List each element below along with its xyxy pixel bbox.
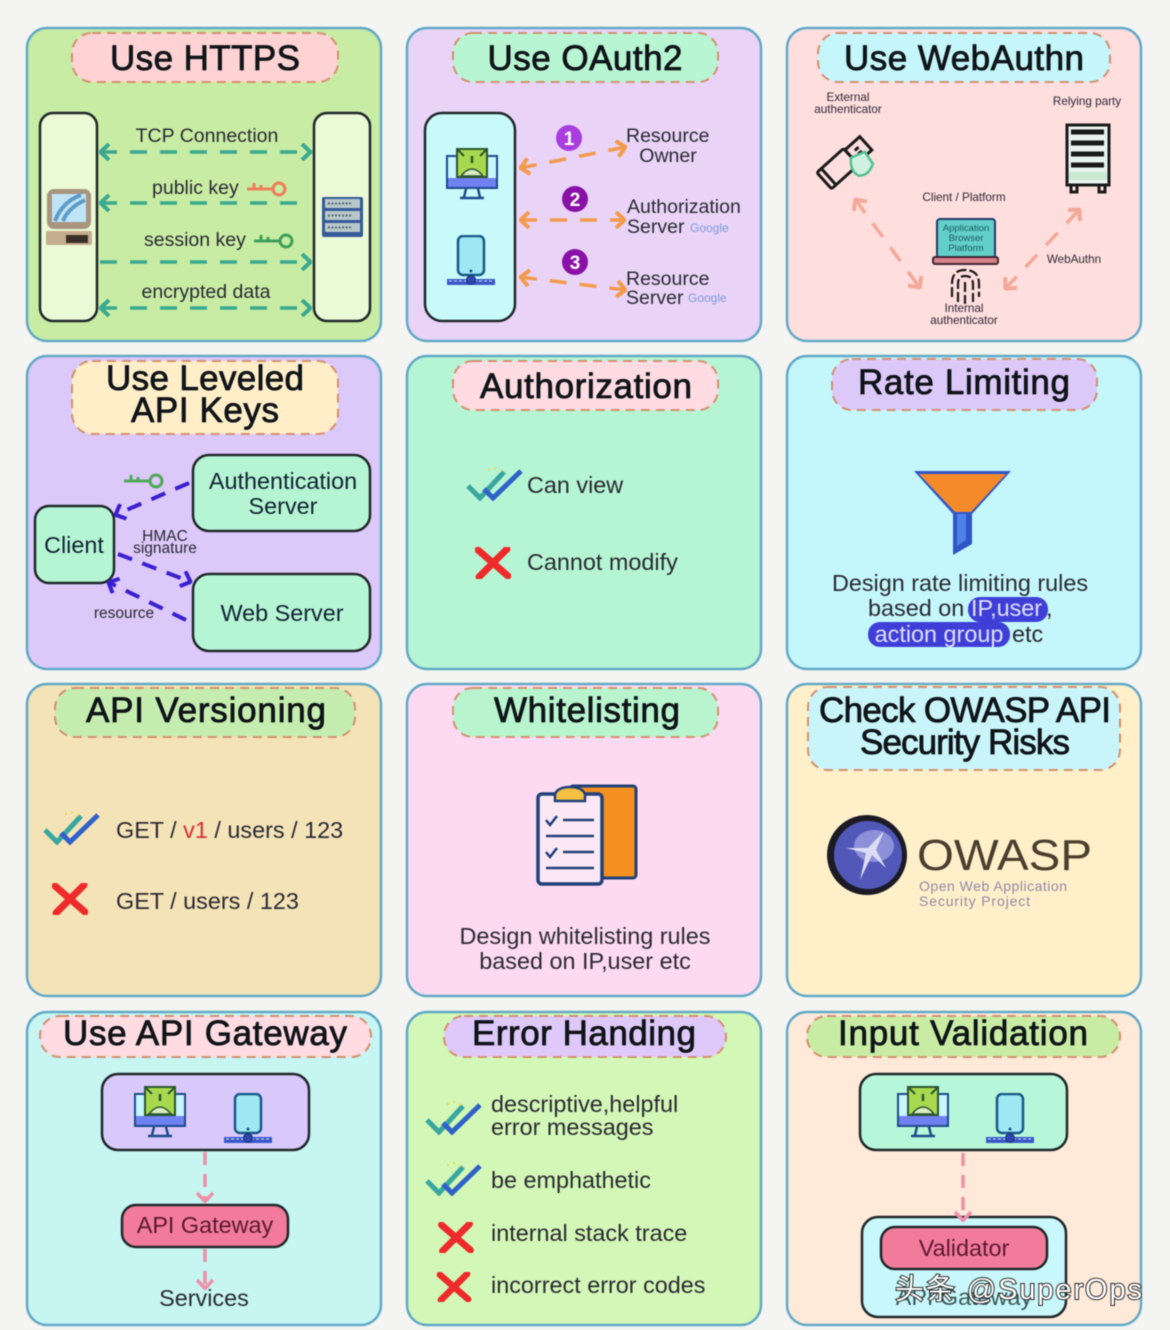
step 2: Authorization Server: Server <box>627 216 685 238</box>
box: Authentication Server: Server <box>249 493 318 519</box>
panel: Error Handing <box>407 1012 761 1325</box>
item: descriptive messages <box>427 1091 678 1140</box>
heading: Use HTTPS: Use HTTPS <box>110 39 300 78</box>
item: internal stack trace: internal stack trace <box>491 1220 687 1246</box>
icon: laptop with application stack: Application <box>943 223 989 234</box>
heading: Input Validation: Input Validation <box>838 1014 1088 1053</box>
text: whitelisting rules <box>460 923 710 974</box>
item: correct versioned URL <box>45 812 343 843</box>
heading: Use API Gateway: Use API Gateway <box>63 1014 348 1053</box>
logo: OWASP wordmark: Security Project <box>919 893 1030 909</box>
label: WebAuthn: WebAuthn <box>1047 253 1101 266</box>
panel: Use API Gateway <box>27 1012 381 1325</box>
item: be emphathetic <box>427 1163 651 1193</box>
panel: Whitelisting <box>407 684 761 996</box>
step 1: Resource Owner: Resource <box>626 125 709 147</box>
icon: laptop with application stack: Platform <box>948 243 984 254</box>
box: Web Server: Web Server <box>220 600 344 626</box>
step 3: Resource Server <box>520 249 727 309</box>
step 1: Resource Owner: 1 <box>564 129 575 150</box>
item: descriptive messages: descriptive,helpful <box>491 1091 678 1117</box>
text: rate limiting rules: based on <box>868 595 964 621</box>
icon: fingerprint <box>952 270 979 304</box>
logo: OWASP wordmark: OWASP <box>917 831 1092 880</box>
box: API Gateway <box>122 1205 288 1247</box>
label: resource: resource <box>94 605 154 622</box>
text: rate limiting rules: Design rate limiting rules <box>832 570 1088 596</box>
step: session key <box>100 229 311 262</box>
client devices box <box>425 113 515 321</box>
heading: Whitelisting: Whitelisting <box>494 691 680 730</box>
step: encrypted data: encrypted data <box>141 281 271 303</box>
text: rate limiting rules: , <box>1046 595 1052 621</box>
label: HMAC signature: HMAC <box>142 528 188 545</box>
label: HMAC signature: signature <box>133 540 197 557</box>
heading: Use OAuth2 <box>453 33 718 82</box>
arrow: gateway to services <box>203 1249 207 1289</box>
heading: Rate Limiting: Rate Limiting <box>858 363 1070 402</box>
label: Services: Services <box>159 1285 249 1311</box>
label: Relying party: Relying party <box>1053 95 1121 108</box>
item: correct versioned URL: GET / v1 / users / 123 <box>116 817 343 843</box>
heading: Use WebAuthn <box>818 33 1110 82</box>
step: public key: public key <box>152 177 239 199</box>
step 2: Authorization Server <box>520 186 741 238</box>
panel: Check OWASP API Security Risks <box>787 684 1141 996</box>
heading: Rate Limiting <box>832 359 1097 410</box>
icon: green key <box>124 475 162 487</box>
panel: Input Validation <box>787 1012 1141 1325</box>
label: External authenticator: External <box>827 91 869 104</box>
text: rate limiting rules <box>832 570 1088 647</box>
client box with computer icon <box>40 113 97 321</box>
step 3: Resource Server: 3 <box>570 253 580 274</box>
heading: Use HTTPS <box>72 33 338 82</box>
step 2: Authorization Server: Google <box>690 221 729 235</box>
icon: USB security key <box>817 135 885 202</box>
heading: Error Handing: Error Handing <box>472 1014 696 1053</box>
box: Authentication Server <box>193 455 370 531</box>
heading: Check OWASP API Security Risks: Check OWASP API <box>819 691 1111 730</box>
item: Can view <box>468 468 623 498</box>
heading: Whitelisting <box>453 688 718 737</box>
logo: OWASP wordmark: Open Web Application <box>919 878 1067 894</box>
icon: clipboard checklist <box>538 786 636 884</box>
box: client devices <box>102 1074 309 1150</box>
panel: API Versioning <box>27 684 381 996</box>
panel: Use OAuth2 <box>407 28 761 341</box>
label: External authenticator <box>814 91 882 116</box>
icon: funnel <box>914 471 1011 555</box>
item: be emphathetic: be emphathetic <box>491 1167 651 1193</box>
text: rate limiting rules: action group <box>875 621 1003 647</box>
label: Internal authenticator: authenticator <box>930 314 998 327</box>
panel: Use WebAuthn <box>787 28 1141 341</box>
logo: OWASP wordmark <box>917 831 1092 909</box>
item: URL without version <box>55 885 299 914</box>
label: Internal authenticator <box>930 302 998 327</box>
arrow: client to web server <box>118 554 191 582</box>
heading: API Versioning <box>55 688 355 737</box>
step 3: Resource Server: Google <box>688 291 727 305</box>
heading: Check OWASP API Security Risks: Security Risks <box>860 723 1070 762</box>
heading: Use WebAuthn: Use WebAuthn <box>844 39 1084 78</box>
step: TCP Connection: TCP Connection <box>136 125 278 147</box>
heading: Authorization: Authorization <box>480 367 692 406</box>
box: Authentication Server: Authentication <box>209 468 357 494</box>
label: Client / Platform: Client / Platform <box>922 191 1006 204</box>
panel: Use HTTPS <box>27 28 381 341</box>
item: Cannot modify <box>478 549 678 577</box>
icon: laptop with application stack: Browser <box>949 233 983 244</box>
item: URL without version: GET / users / 123 <box>116 888 299 914</box>
arrow: external authenticator to internal authenticator <box>855 199 920 288</box>
box: client devices <box>860 1074 1067 1150</box>
label: HMAC signature <box>133 528 197 557</box>
heading: API Versioning: API Versioning <box>86 691 326 730</box>
heading: Use Leveled API Keys: API Keys <box>131 391 279 430</box>
step: public key <box>100 177 310 203</box>
item: descriptive messages: error messages <box>491 1114 654 1140</box>
step: session key: session key <box>144 229 246 251</box>
arrow: web server to client <box>108 582 186 620</box>
step 2: Authorization Server: 2 <box>570 190 580 211</box>
box: Web Server <box>193 574 370 651</box>
item: Can view: Can view <box>527 472 623 498</box>
step 3: Resource Server: Server <box>626 287 684 309</box>
text: rate limiting rules: etc <box>1012 621 1044 647</box>
item: incorrect error codes: incorrect error codes <box>491 1272 706 1298</box>
arrow: WebAuthn exchange <box>1005 209 1080 289</box>
box: Client <box>35 506 114 583</box>
icon: relying party server <box>1067 125 1109 192</box>
text: whitelisting rules: Design whitelisting rules <box>460 923 710 949</box>
item: Cannot modify: Cannot modify <box>527 549 678 575</box>
icon: laptop with application stack <box>933 219 998 264</box>
arrow: auth server to client <box>115 483 189 515</box>
box: API Gateway with Validator: Validator <box>919 1235 1009 1261</box>
heading: Authorization <box>453 361 718 410</box>
watermark: 头条 @SuperOps <box>895 1273 1142 1306</box>
server box with rack icon <box>314 113 370 321</box>
arrow: clients to validator <box>961 1153 965 1221</box>
step 3: Resource Server: Resource <box>626 268 709 290</box>
label: Internal authenticator: Internal <box>945 302 983 315</box>
heading: Check OWASP API Security Risks <box>808 687 1120 770</box>
panel: Use Leveled API Keys <box>27 356 381 669</box>
label: External authenticator: authenticator <box>814 103 882 116</box>
heading: Use OAuth2: Use OAuth2 <box>488 39 682 78</box>
logo: OWASP globe <box>827 815 907 895</box>
box: Client: Client <box>44 532 104 558</box>
box: API Gateway: API Gateway <box>137 1212 274 1238</box>
heading: Use Leveled API Keys: Use Leveled <box>106 359 304 398</box>
text: rate limiting rules: IP,user <box>971 595 1042 621</box>
panel: Authorization <box>407 356 761 669</box>
text: whitelisting rules: based on IP,user etc <box>479 948 691 974</box>
item: internal stack trace <box>441 1220 687 1251</box>
step 1: Resource Owner: Owner <box>639 145 697 167</box>
heading: Use Leveled API Keys <box>72 359 338 434</box>
arrow: clients to gateway <box>203 1152 207 1202</box>
box: API Gateway with Validator <box>862 1217 1066 1317</box>
step 1: Resource Owner <box>520 125 709 168</box>
panel: Rate Limiting <box>787 356 1141 669</box>
box: API Gateway with Validator: API Gateway <box>896 1284 1033 1310</box>
step 2: Authorization Server: Authorization <box>627 196 741 218</box>
